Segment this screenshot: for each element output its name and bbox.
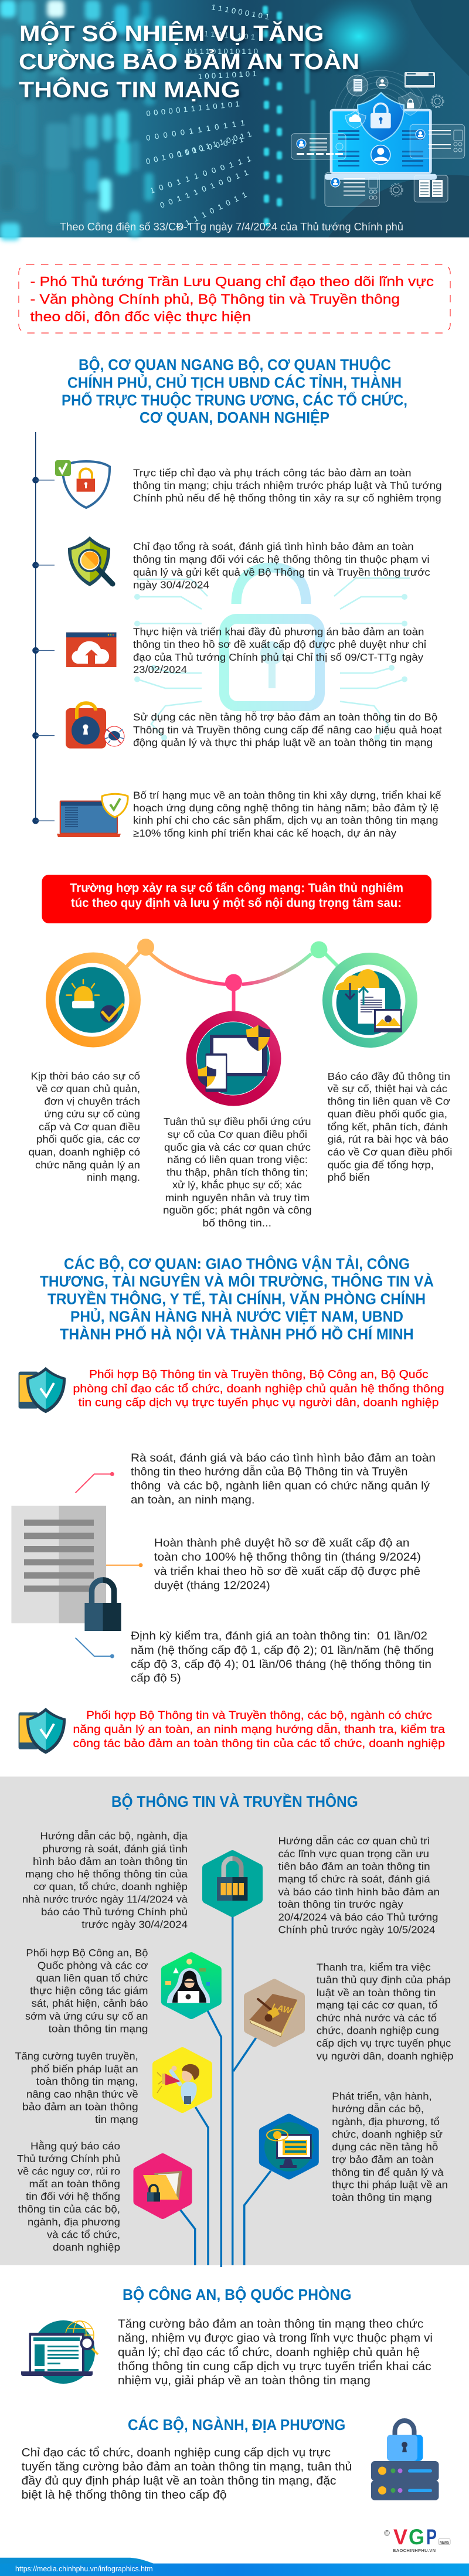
text: guide review and report: mạng cho hệ thống thông tin của	[25, 1868, 188, 1880]
icon: tan hexagon law book	[248, 1983, 301, 2043]
heading: ministries and localities: PHỐ TRỰC THUỘC TRUNG ƯƠNG, CÁC TỔ CHỨC,	[62, 392, 407, 409]
text: follow coordination: nguồn gốc; phát ngôn và công	[163, 1204, 312, 1216]
logo: VGP: NEWS	[440, 2541, 449, 2545]
text: thống thông tin cung cấp dịch vụ trực tuyến triển khai các	[118, 2360, 431, 2373]
text: priority sectors: 20/4/2024 và báo cáo Thủ tướng	[278, 1911, 438, 1923]
icon: green hexagon hacker	[165, 1956, 217, 2015]
section: ministries and localities	[22, 2416, 439, 2502]
text: monitoring: sát, phát hiện, cảnh báo	[32, 1997, 148, 2009]
text: approval deadlines: và triển khai theo hồ sơ đề xuất cấp độ được phê	[154, 1565, 420, 1578]
text: follow coordination: xử lý, khắc phục sự cố; xác	[172, 1178, 302, 1191]
red text: coordinate online services: tin cung cấp dịch vụ trực tuyến phục vụ người dân, doanh nghiệp	[79, 1396, 439, 1409]
text: review: Chỉ đạo tổng rà soát, đánh giá tình hình bảo đảm an toàn	[133, 541, 414, 552]
icon: blue hexagon monitor with eye	[263, 2118, 315, 2175]
red text: guidance and inspection: Phối hợp Bộ Thông tin và Truyền thông, các bộ, ngành có chức	[86, 1709, 432, 1722]
icon: phone with shield	[19, 1367, 66, 1413]
text: report incidents promptly: về cơ quan chủ quản,	[36, 1083, 140, 1095]
text: nhiệm vụ, giải pháp về an toàn thông tin mạng	[118, 2374, 371, 2387]
text: quản lý; chỉ đạo các tổ chức, doanh nghiệp chủ quản hệ	[118, 2346, 420, 2359]
text: report incidents promptly: Kịp thời báo cáo sự cố	[30, 1070, 140, 1082]
icon: alert circle	[46, 952, 141, 1047]
text: approval deadlines: toàn cho 100% hệ thống thông tin (tháng 9/2024)	[154, 1551, 421, 1564]
icon: laptop with shield	[57, 794, 128, 837]
text: approval deadlines	[154, 1537, 421, 1592]
red banner: Trường hợp xảy ra sự cố tấn công mạng: Tuân thủ nghiêm	[70, 882, 403, 895]
text: awareness: Tăng cường tuyên truyền,	[15, 2050, 138, 2062]
heading: BỘ CÔNG AN, BỘ QUỐC PHÒNG	[123, 2286, 352, 2303]
text: full report	[328, 1070, 452, 1183]
text: monitoring: Phối hợp Bộ Công an, Bộ	[26, 1947, 148, 1959]
text: đầy đủ quy định pháp luật về an toàn thông tin mạng, đặc	[22, 2475, 336, 2487]
text: report incidents promptly: quan, doanh nghiệp có	[28, 1146, 140, 1158]
text: quarterly report: mất an toàn thông	[29, 2178, 120, 2190]
text: platforms development: hướng dẫn các bộ,	[332, 2102, 424, 2115]
text: guide review and report: trước ngày 30/4/2024	[81, 1919, 188, 1931]
text: review and report: thông tin theo hướng dẫn của Bộ Thông tin và Truyền	[131, 1464, 407, 1478]
text: guide review and report: phương rà soát, đánh giá tình	[42, 1843, 188, 1854]
header banner: 1 0 0 1 1 1 0 0 0 1 1 1	[149, 154, 252, 195]
text: budget: Bố trí hạng mục về an toàn thông tin khi xây dựng, triển khai kế	[133, 790, 441, 801]
text: platforms	[133, 711, 442, 748]
text: report incidents promptly: đơn vị chuyên trách	[45, 1095, 140, 1107]
red text: guidance and inspection: năng quản lý an toàn, an ninh mạng hướng dẫn, thanh tra, kiểm tra	[73, 1722, 445, 1736]
red text: guidance and inspection	[73, 1709, 445, 1750]
text: năng, nhiệm vụ được giao và trong lĩnh vực thuộc phạm vi	[118, 2332, 433, 2345]
text: full report: cáo về Cơ quan điều phối	[328, 1146, 452, 1158]
circuit lines	[180, 1916, 271, 2267]
text: inspection: chức nhà nước và các tổ	[317, 2012, 437, 2024]
logo: VGP: ©	[384, 2529, 390, 2537]
text: priority sectors: Hướng dẫn các cơ quan chủ trì	[278, 1834, 430, 1847]
heading: named ministries: THÀNH PHỐ HÀ NỘI VÀ THÀNH PHỐ HỒ CHÍ MINH	[60, 1326, 414, 1343]
heading: BỘ THÔNG TIN VÀ TRUYỀN THÔNG	[111, 1793, 358, 1810]
heading: named ministries: THƯƠNG, TÀI NGUYÊN VÀ MÔI TRƯỜNG, THÔNG TIN VÀ	[40, 1272, 434, 1290]
text: report incidents promptly: phối quốc gia, các cơ	[36, 1133, 140, 1145]
text: priority sectors: toàn thông tin trước ngày	[278, 1898, 403, 1910]
text: awareness: tin mạng	[95, 2113, 138, 2125]
text: tuyến tăng cường bảo đảm an toàn thông tin mạng, tuân thủ	[22, 2461, 352, 2473]
header banner: 1 0 0 1 1 0 1 0 1	[198, 69, 257, 81]
text: review and report: thông và các bộ, ngành liên quan có chức năng quản lý	[131, 1480, 430, 1493]
text: guide review and report	[22, 1830, 188, 1931]
logo: VGP: G	[409, 2525, 424, 2549]
text: quarterly report	[17, 2140, 120, 2253]
title	[19, 20, 359, 103]
text: awareness: bảo đảm an toàn thông	[22, 2101, 138, 2112]
text: monitoring: quan liên quan tổ chức	[36, 1972, 148, 1984]
text: awareness	[15, 2050, 138, 2125]
text: priority sectors: mạng tổ chức rà soát, đánh giá	[278, 1873, 430, 1885]
text: direct leadership	[133, 467, 442, 504]
text: inspection: Thanh tra, kiểm tra việc	[317, 1961, 431, 1973]
text: direct leadership: Chính phủ nếu để hệ thống thông tin xảy ra sự cố nghiêm trọng	[133, 492, 441, 504]
callout: dashed red box	[19, 264, 450, 333]
text: approval deadlines: duyệt (tháng 12/2024)	[154, 1579, 270, 1592]
text: inspection: chức, doanh nghiệp cung	[317, 2025, 439, 2037]
text: full report: tổng kết, phân tích, đánh	[328, 1121, 448, 1133]
text: budget: kinh phí chi cho các sản phẩm, dịch vụ an toàn thông tin mạng	[133, 814, 439, 826]
red text: coordinate online services	[73, 1368, 444, 1409]
text: report incidents promptly: chức năng quản lý an	[35, 1159, 140, 1171]
text: full report: thông tin liên quan về Cơ	[328, 1095, 450, 1107]
icon: yellow hexagon man with megaphone	[157, 2051, 208, 2109]
text: inspection: tuân thủ quy định của pháp	[317, 1974, 451, 1986]
heading: ministries and localities: CHÍNH PHỦ, CHỦ TỊCH UBND CÁC TỈNH, THÀNH	[67, 373, 402, 392]
text: platforms development: thực thi pháp luật về an	[332, 2179, 448, 2191]
heading: named ministries: TRUYỀN THÔNG, Y TẾ, TÀI CHÍNH, VĂN PHÒNG CHÍNH	[47, 1290, 426, 1308]
callout: dashed red box: - Văn phòng Chính phủ, Bộ Thông tin và Truyền thông	[30, 291, 400, 307]
text: platforms: Sử dụng các nền tảng hỗ trợ bảo đảm an toàn thông tin do Bộ	[133, 711, 437, 723]
text: review: ngày 30/4/2024	[133, 579, 209, 591]
text: priority sectors: các lĩnh vực quan trọng cần ưu	[278, 1848, 429, 1860]
text: review: quản lý và gửi kết quả về Bộ Thông tin và Truyền thông trước	[133, 566, 430, 578]
section: public security and defence	[21, 2286, 433, 2387]
subtitle: Theo Công điện số 33/CĐ-TTg ngày 7/4/2024 của Thủ tướng Chính phủ	[60, 221, 403, 233]
text: report incidents promptly: cấp và Cơ quan điều	[39, 1121, 140, 1133]
text: follow coordination: minh nguyên nhân và truy tìm	[165, 1192, 310, 1204]
heading: CÁC BỘ, NGÀNH, ĐỊA PHƯƠNG	[128, 2416, 345, 2434]
header banner: 1 0 0 0 1 1 1 0 0 1 1	[177, 130, 253, 159]
text: inspection: cấp dịch vụ trực tuyến phục	[317, 2037, 451, 2049]
text: priority sectors: tiên bảo đảm an toàn thông tin	[278, 1860, 430, 1872]
text: monitoring: sớm và ứng cứu sự cố an	[25, 2010, 148, 2022]
title: THÔNG TIN MẠNG	[19, 76, 240, 103]
text: report incidents promptly: ứng cứu sự cố cùng	[45, 1108, 140, 1120]
text: Tăng cường bảo đảm an toàn thông tin mạng theo chức	[118, 2318, 423, 2331]
text: implementation: thông tin theo hồ sơ đề xuất cấp độ được phê duyệt như chỉ	[133, 638, 426, 650]
heading: ministries and localities: BỘ, CƠ QUAN NGANG BỘ, CƠ QUAN THUỘC	[79, 356, 391, 373]
text: implementation: 23/02/2024	[133, 664, 187, 675]
text: quarterly report: thông tin của các bộ,	[18, 2203, 120, 2215]
text: platforms development: dụng các nền tảng hỗ	[332, 2140, 438, 2153]
text: full report: quốc gia để tổng hợp,	[328, 1159, 434, 1171]
header banner: 0 0 1 0 0 1 1 1 0 0 0 1 1	[145, 135, 244, 166]
text: quarterly report: doanh nghiệp	[53, 2241, 120, 2253]
footer bar: https://media.chinhphu.vn/infographics.htm	[15, 2564, 153, 2573]
text: budget: hoạch ứng dụng công nghệ thông tin hàng năm; bảo đảm tỷ lệ	[133, 802, 439, 814]
header banner: 0 0 1 1 1 0 1 0 0 1 1	[159, 168, 249, 210]
text: direct leadership: thông tin mạng; chịu trách nhiệm trước pháp luật và Thủ tướng	[133, 480, 442, 491]
text: awareness: toàn thông tin mạng,	[36, 2075, 138, 2087]
panel: ministry of information and communications	[0, 1776, 469, 2267]
text: guide review and report: cơ quan, tổ chức, doanh nghiệp	[33, 1881, 188, 1892]
logo: VGP: BAOCHINHPHU.VN	[393, 2548, 436, 2553]
heading: named ministries: PHỦ, NGÂN HÀNG NHÀ NƯỚC VIỆT NAM, UBND	[70, 1307, 403, 1326]
text: review and report: Rà soát, đánh giá và báo cáo tình hình bảo đảm an toàn	[131, 1452, 436, 1464]
text: priority sectors: và báo cáo tình hình bảo đảm an	[278, 1886, 440, 1898]
icon: padlock on server	[371, 2421, 439, 2500]
icon: document with lock	[11, 1506, 121, 1631]
header banner	[0, 0, 469, 240]
text: priority sectors	[278, 1834, 440, 1935]
header banner: 1 1 1 0 0 0 1 0 1	[210, 2, 270, 21]
text: monitoring	[25, 1947, 148, 2034]
text: implementation: Thực hiện và triển khai đầy đủ phương án bảo đảm an toàn	[133, 626, 424, 637]
icon: report circle	[322, 953, 417, 1048]
text	[22, 2446, 352, 2502]
text: review	[133, 541, 430, 591]
text: inspection: luật về an toàn thông tin	[317, 1987, 436, 1999]
logo: VGP	[384, 2525, 450, 2553]
timeline: five responsibilities	[32, 432, 442, 839]
text: awareness: phổ biến pháp luật an	[31, 2063, 138, 2075]
text: platforms development: trợ bảo đảm an toàn	[332, 2154, 434, 2166]
text: budget: ≥10% tổng kinh phí triển khai các kế hoạch, dự án này	[133, 827, 396, 839]
text: periodic inspection: Định kỳ kiểm tra, đánh giá an toàn thông tin: 01 lần/02	[131, 1630, 427, 1643]
text: budget	[133, 790, 441, 839]
red text: coordinate online services: phòng chỉ đạo các tổ chức, doanh nghiệp chủ quản hệ thống thông	[73, 1382, 444, 1395]
connectors from document	[76, 1472, 143, 1658]
text: guide review and report: nhà nước trước ngày 11/4/2024 và	[22, 1894, 188, 1905]
text: periodic inspection: năm (hệ thống cấp độ 1, cấp độ 2); 01 lần/năm (hệ thống	[131, 1644, 434, 1657]
text: platforms development: toàn thông tin mạng	[332, 2191, 432, 2203]
text: monitoring: thực hiện công tác giám	[30, 1985, 148, 1997]
text: review: thông tin mạng đối với các hệ thống thông tin thuộc phạm vi	[133, 553, 430, 565]
icon: shield with magnifier	[68, 536, 113, 586]
text: platforms development	[332, 2091, 448, 2203]
logo: VGP: P	[426, 2525, 437, 2549]
text: quarterly report: và các tổ chức,	[47, 2229, 120, 2241]
text: approval deadlines: Hoàn thành phê duyệt hồ sơ đề xuất cấp độ an	[154, 1537, 409, 1549]
text: follow coordination	[163, 1116, 312, 1229]
text: quarterly report: Thủ tướng Chính phủ	[17, 2153, 120, 2164]
text: review and report	[131, 1452, 436, 1507]
red text: coordinate online services: Phối hợp Bộ Thông tin và Truyền thông, Bộ Công an, Bộ Quốc	[89, 1368, 429, 1381]
watermark: padlock with circuit lines	[134, 567, 410, 740]
text: inspection: vụ người dân, doanh nghiệp	[317, 2050, 454, 2062]
text: monitoring: Quốc phòng và các cơ	[38, 1960, 148, 1972]
red banner: túc theo quy định và lưu ý một số nội dung trọng tâm sau:	[71, 896, 402, 910]
text: guide review and report: Hướng dẫn các bộ, ngành, địa	[40, 1830, 188, 1842]
text: follow coordination: quốc gia và các cơ quan chức	[164, 1141, 311, 1153]
header banner: 0 0 0 0 0 1 1 1 1 0 1 0 1	[146, 99, 240, 118]
heading: named ministries: CÁC BỘ, CƠ QUAN: GIAO THÔNG VẬN TẢI, CÔNG	[64, 1255, 410, 1272]
text: periodic inspection: cấp độ 3, cấp độ 4); 01 lần/06 tháng (hệ thống thông tin	[131, 1658, 431, 1671]
heading: named ministries	[40, 1255, 434, 1343]
icon: cloud upload window	[66, 633, 116, 667]
text: awareness: nâng cao nhận thức về	[26, 2088, 138, 2100]
text: guide review and report: báo cáo Thủ tướng Chính phủ	[41, 1906, 188, 1918]
text: full report: quan điều phối quốc gia,	[328, 1108, 447, 1120]
text: platforms development: thông tin để quản lý và	[332, 2166, 444, 2178]
text: platforms: động quản lý và thực thi pháp luật về an toàn thông tin mạng	[133, 736, 433, 748]
icon: shield with lock and check	[55, 460, 110, 508]
icon: devices circle	[186, 1011, 281, 1106]
text: direct leadership: Trực tiếp chỉ đạo và phụ trách công tác bảo đảm an toàn	[133, 467, 412, 479]
text: monitoring: toàn thông tin mạng	[49, 2023, 148, 2034]
text: Chỉ đạo các tổ chức, doanh nghiệp cung cấp dịch vụ trực	[22, 2446, 331, 2459]
callout: dashed red box: theo dõi, đôn đốc việc thực hiện	[30, 309, 251, 324]
text: full report: phổ biến	[328, 1171, 370, 1183]
text: implementation	[133, 626, 426, 675]
title: MỘT SỐ NHIỆM VỤ TĂNG	[19, 20, 324, 46]
text: full report: giá, rút ra bài học và báo	[328, 1133, 448, 1145]
text: quarterly report: ngành, địa phương	[28, 2216, 120, 2228]
text: quarterly report: về các nguy cơ, rủi ro	[18, 2166, 120, 2177]
text: inspection	[317, 1961, 454, 2062]
title: CƯỜNG BẢO ĐẢM AN TOÀN	[19, 49, 359, 74]
icon: phone with shield	[19, 1708, 66, 1754]
text: inspection: mạng tại các cơ quan, tổ	[317, 1999, 437, 2011]
text: priority sectors: Chính phủ trước ngày 10/5/2024	[278, 1923, 436, 1935]
heading: ministries and localities	[62, 356, 407, 426]
callout: dashed red box: - Phó Thủ tướng Trần Lưu Quang chỉ đạo theo dõi lĩnh vực	[30, 274, 434, 289]
header banner: 0 1 1 1 0 1 0 1 0 1 1 0	[188, 47, 258, 56]
text: guide review and report: hình bảo đảm an toàn thông tin	[33, 1855, 188, 1867]
text: periodic inspection	[131, 1630, 434, 1685]
text: report incidents promptly	[28, 1070, 140, 1183]
icon: lock and virus	[66, 703, 124, 749]
text: follow coordination: sự cố của Cơ quan điều phối	[168, 1129, 307, 1140]
text: implementation: đạo của Thủ tướng Chính phủ tại Chỉ thị số 09/CT-TTg ngày	[133, 651, 423, 663]
icon: teal hexagon padlock	[206, 1854, 259, 1913]
text: full report: về sự cố, thiệt hại và các	[328, 1083, 447, 1095]
text: quarterly report: tin đối với hệ thống	[26, 2191, 120, 2203]
header banner: 0 1 1 1 0 1 0 1 1	[176, 190, 248, 232]
text: full report: Báo cáo đầy đủ thông tin	[328, 1070, 450, 1082]
text	[118, 2318, 433, 2387]
icon: tan hexagon law book: LAW	[271, 2001, 293, 2016]
text: follow coordination: bố thông tin...	[202, 1217, 271, 1229]
text: follow coordination: năng có liên quan trong việc:	[167, 1154, 308, 1165]
header banner: 1 0 1 1 0 1 1 1 0 1	[191, 28, 256, 42]
text: platforms development: Phát triển, vận hành,	[332, 2091, 432, 2102]
icon: laptop with globe	[21, 2320, 98, 2384]
red text: guidance and inspection: công tác bảo đảm an toàn thông tin của các tổ chức, doanh nghiệp	[73, 1737, 445, 1750]
text: follow coordination: thu thập, phân tích thông tin;	[166, 1167, 308, 1178]
text: periodic inspection: cấp độ 5)	[131, 1672, 181, 1685]
logo: VGP: V	[393, 2525, 407, 2549]
header illustration: laptop and shield	[291, 70, 465, 206]
text: follow coordination: Tuân thủ sự điều phối ứng cứu	[164, 1116, 311, 1127]
text: biệt là hệ thống thông tin theo cấp độ	[22, 2489, 227, 2502]
text: review and report: an toàn, an ninh mạng.	[131, 1494, 255, 1507]
text: quarterly report: Hằng quý báo cáo	[30, 2140, 120, 2152]
icon: pink hexagon folder with lock	[137, 2157, 188, 2215]
red banner	[42, 875, 431, 923]
heading: ministries and localities: CƠ QUAN, DOANH NGHIỆP	[140, 409, 329, 426]
text: report incidents promptly: ninh mạng.	[87, 1171, 140, 1183]
text: platforms development: chức, doanh nghiệp sử	[332, 2128, 443, 2140]
header banner: 0 0 0 0 0 1 1 1 0 1 1 1	[145, 118, 245, 142]
text: platforms: Thông tin và Truyền thông cung cấp để nâng cao hiệu quả hoạt	[133, 724, 442, 736]
text: platforms development: ngành, địa phương, tổ	[332, 2116, 440, 2128]
connector between circles	[126, 939, 338, 1012]
footer bar	[0, 2558, 469, 2576]
